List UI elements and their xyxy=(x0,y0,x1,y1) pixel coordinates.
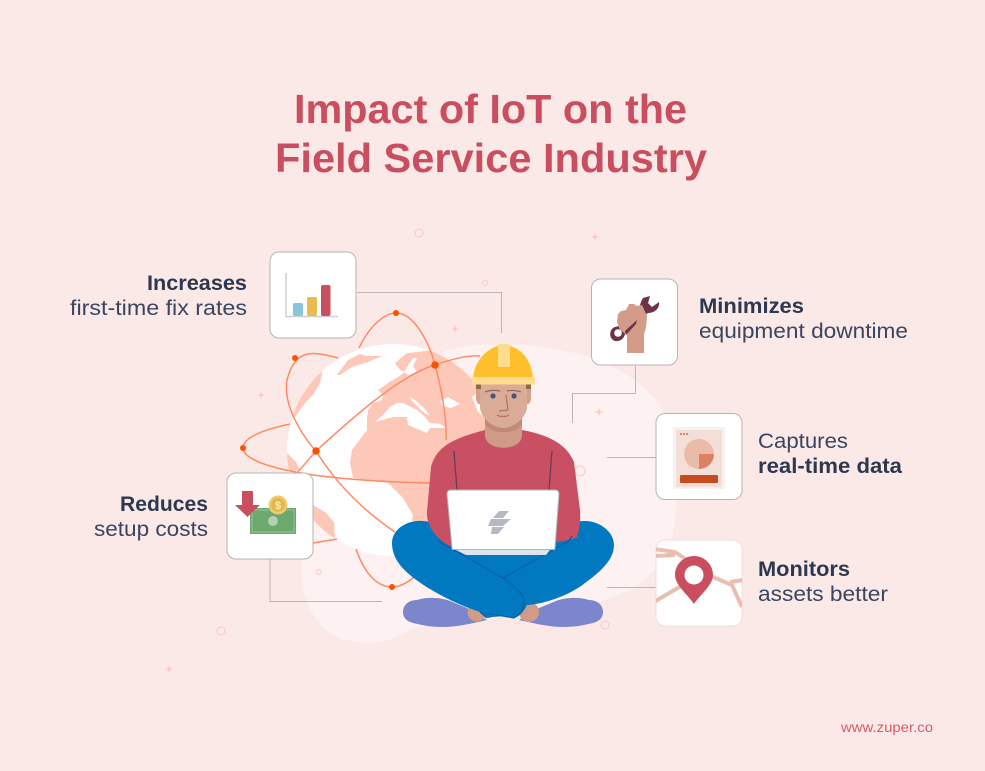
title: Field Service Industry xyxy=(275,135,707,181)
label: monitors: assets better xyxy=(758,583,888,606)
label: minimizes: equipment downtime xyxy=(699,320,908,343)
white mediterranean xyxy=(375,403,447,433)
card: monitors assets better xyxy=(654,540,744,626)
card: captures real-time data xyxy=(656,414,742,500)
title: Impact of IoT on the xyxy=(294,86,687,132)
label: captures xyxy=(758,430,902,478)
hard hat xyxy=(473,345,533,378)
label: monitors: Monitors xyxy=(758,558,850,581)
label: captures: Captures xyxy=(758,430,848,453)
shirt xyxy=(427,430,580,547)
card: increases first-time fix rates xyxy=(270,252,356,338)
card: reduces setup costs xyxy=(227,473,313,559)
globe xyxy=(287,344,485,556)
neck and head xyxy=(485,412,522,448)
label: minimizes: Minimizes xyxy=(699,295,804,318)
title xyxy=(275,86,707,181)
white black sea and north sea xyxy=(404,358,460,416)
icon: map pin xyxy=(654,549,744,607)
continents: upper-left crescent xyxy=(292,372,322,418)
continents: greenland xyxy=(337,354,382,375)
label: increases xyxy=(70,272,247,320)
worker illustration xyxy=(392,344,614,627)
decorative rings and sparkles xyxy=(165,229,609,673)
connector lines xyxy=(270,292,656,602)
label: increases: Increases xyxy=(147,272,247,295)
label: reduces xyxy=(94,493,208,541)
label: reduces: setup costs xyxy=(94,518,208,541)
laptop xyxy=(447,490,559,550)
label: monitors xyxy=(758,558,888,606)
label: captures: real-time data xyxy=(758,455,902,478)
label: reduces: Reduces xyxy=(120,493,208,516)
light background blob xyxy=(301,344,677,643)
jeans xyxy=(392,521,614,618)
icon: bar chart xyxy=(286,273,338,316)
white arabian peninsula xyxy=(472,392,486,418)
continents: south america xyxy=(314,505,335,538)
website url: www.zuper.co xyxy=(840,720,933,735)
feet xyxy=(403,598,487,627)
icon: money with down arrow: $ xyxy=(275,500,281,512)
icon: fist holding wrench xyxy=(610,296,659,353)
continents: eurasia and africa xyxy=(350,350,485,522)
label: increases: first-time fix rates xyxy=(70,297,247,320)
label: minimizes xyxy=(699,295,908,343)
continents: small western islands xyxy=(287,453,300,471)
icon: data report xyxy=(673,427,725,489)
card: minimizes equipment downtime xyxy=(592,279,678,365)
orbits xyxy=(240,310,480,590)
leg crease lines xyxy=(438,536,572,618)
